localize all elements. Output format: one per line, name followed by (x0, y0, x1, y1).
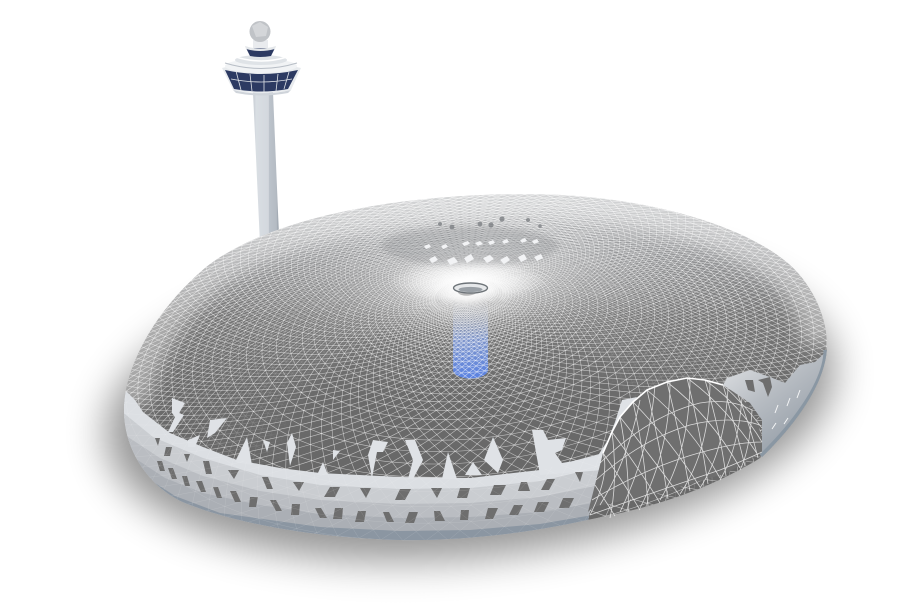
right facade panels (723, 354, 826, 454)
illustration: Jewel Changi dome and control tower (82, 21, 858, 587)
white slashes on right facade (772, 390, 800, 429)
light panels around the funnel (424, 238, 543, 265)
central depression (382, 226, 558, 266)
arch opening (588, 378, 762, 518)
tower cab (222, 55, 301, 96)
tower top (245, 21, 276, 57)
blue waterfall cylinder (453, 300, 488, 378)
tower shaft (253, 92, 279, 244)
faint mesh on panels (126, 402, 594, 540)
arch lattice (590, 378, 762, 518)
dome (124, 194, 827, 540)
fine mesh on far and side slopes (124, 194, 827, 501)
facade openings row B (157, 461, 574, 523)
funnel glow (388, 259, 548, 303)
dome base surface (124, 194, 827, 540)
control tower (222, 21, 301, 244)
jagged panels rising into mesh (168, 397, 637, 479)
lattice mesh (124, 194, 827, 518)
rim lightening (124, 194, 827, 405)
right rim edge (762, 350, 827, 457)
arch rim (603, 378, 723, 453)
facade openings row A (155, 438, 583, 500)
ground shadow (90, 210, 850, 594)
arch interior (588, 378, 762, 512)
lower facade band (124, 350, 827, 540)
dark specks on far rim (438, 216, 542, 229)
oculus (454, 283, 488, 293)
